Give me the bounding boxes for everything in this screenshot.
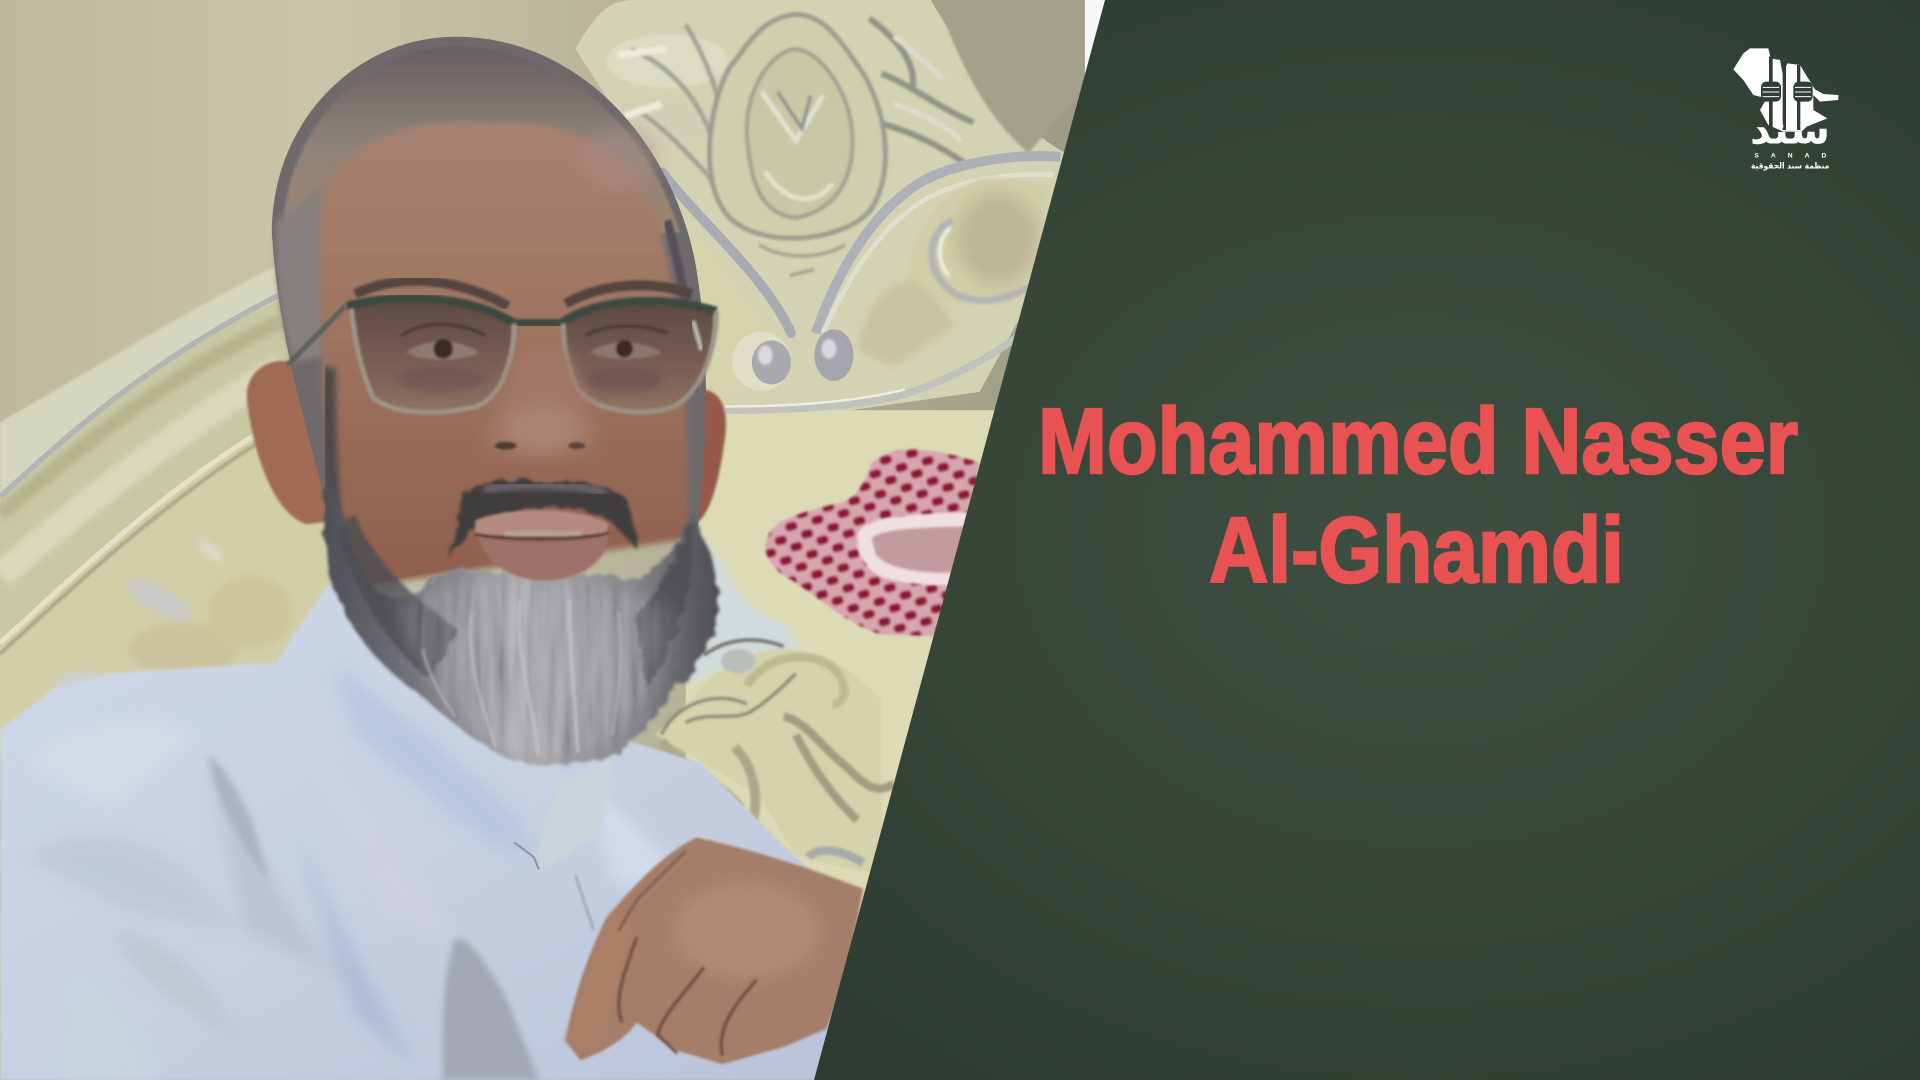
- logo Arabic wordmark: سند: [1750, 107, 1830, 153]
- left sideburn: [328, 367, 343, 588]
- logo SANAD letters: SANAD: [1754, 153, 1827, 160]
- moustache grey tips: [484, 485, 606, 492]
- skull and hair: [272, 37, 706, 588]
- left eye: [397, 324, 485, 392]
- right ear: [698, 388, 728, 524]
- logo map with prison bars: [1733, 48, 1838, 132]
- upholstery: lower right ornament: [655, 640, 894, 876]
- wall: [0, 0, 1090, 1080]
- shirt fold shadow: [442, 938, 539, 1080]
- shirt: [0, 582, 882, 1080]
- scroll curl: [857, 178, 1051, 367]
- beard: [324, 471, 718, 765]
- glasses: [288, 298, 716, 412]
- forehead highlight: [579, 127, 658, 191]
- pale blue fabric beside beard: [686, 539, 802, 686]
- right panel: dark green slanted background: [814, 0, 1920, 1080]
- beard strands: [422, 600, 621, 759]
- beard hair texture: [398, 578, 673, 765]
- nose: [487, 349, 598, 455]
- upholstery: left patterned panel: [54, 538, 294, 700]
- head and face: [247, 37, 726, 765]
- photo: man seated against a headboard: [0, 0, 1090, 1080]
- hair top: [284, 47, 680, 245]
- left hair side: [276, 184, 328, 362]
- silver balls: [732, 329, 853, 391]
- silver arcs: [662, 173, 791, 333]
- title: person's name: [1038, 389, 1798, 602]
- brows: [355, 281, 692, 306]
- lips and mouth: [475, 510, 609, 580]
- right sideburn: [691, 404, 695, 539]
- carved leaves, right: [869, 18, 973, 165]
- title line 2: Al-Ghamdi: [1209, 498, 1624, 602]
- left ear: [245, 359, 328, 526]
- shirt folds: [40, 675, 662, 1080]
- left fist: [1761, 82, 1781, 102]
- carved rose: [710, 15, 885, 276]
- beard dark jaw: [337, 514, 693, 686]
- hand: [566, 838, 863, 1064]
- right eye: [585, 326, 667, 392]
- lower moulding: [725, 333, 1022, 410]
- logo Arabic organisation name: منظمة سند الحقوقية: [1751, 161, 1829, 172]
- title line 1: Mohammed Nasser: [1038, 389, 1798, 493]
- folded red-and-white headscarf: [765, 450, 980, 637]
- logo: SANAD organisation: [1733, 48, 1838, 172]
- headboard: left section: [0, 268, 330, 759]
- finger creases: [619, 937, 757, 1056]
- right temple hair: [667, 220, 696, 392]
- headboard: centre carving: [576, 0, 1090, 949]
- right fist: [1793, 82, 1813, 102]
- carved leaves, left: [606, 24, 729, 184]
- shirt collar placket: [540, 774, 606, 868]
- face skin: [320, 121, 688, 588]
- moustache: [449, 479, 639, 557]
- left lens: [351, 300, 512, 412]
- right lens: [565, 304, 714, 412]
